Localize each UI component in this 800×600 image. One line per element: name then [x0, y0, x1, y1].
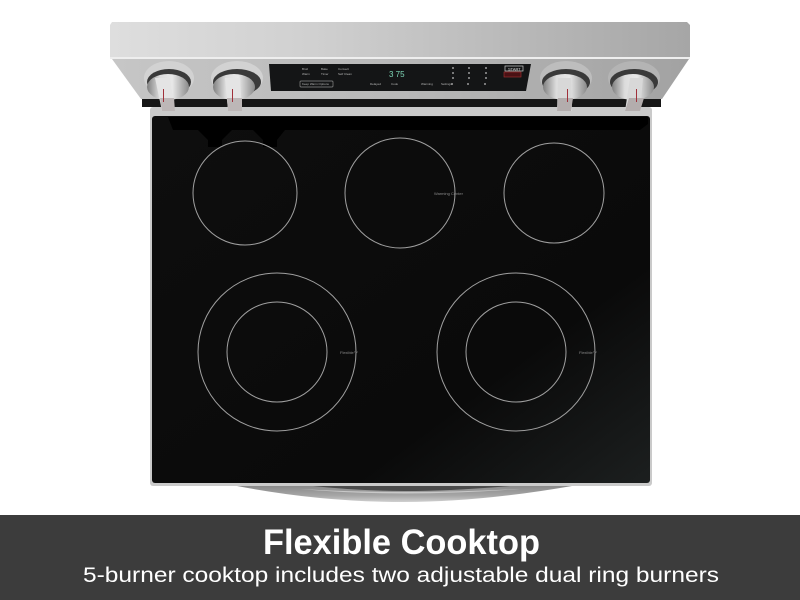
subheading: 5-burner cooktop includes two adjustable dual ring burners [83, 564, 719, 587]
burner: rear center warming: Warming Center [434, 191, 464, 196]
control display panel: Cook [391, 82, 399, 86]
control display panel: Delayed [370, 82, 381, 86]
control display panel: Warming [421, 82, 433, 86]
burner: front right dual ring [437, 273, 597, 431]
control display panel: Bake [321, 67, 328, 71]
burner: front left dual ring [198, 273, 358, 431]
control knob 1 [144, 61, 194, 111]
control display panel: Keep Warm Options [302, 82, 329, 86]
control display panel: Broil [302, 67, 308, 71]
control knob 4 [608, 61, 660, 111]
burner: rear center warming [345, 138, 464, 248]
burner: front left dual ring: Flexible™ [340, 350, 358, 355]
heading: Flexible Cooktop [263, 523, 540, 562]
burner: front right dual ring: Flexible™ [579, 350, 597, 355]
control display panel [269, 64, 531, 91]
oven door handle [237, 486, 572, 502]
reflection of knobs on glass [154, 117, 648, 147]
start and stop buttons [504, 66, 523, 77]
control display panel: Warm [302, 72, 310, 76]
control knob 3 [540, 61, 592, 111]
steel cooktop body [150, 107, 652, 486]
control display panel: Self Clean [338, 72, 352, 76]
glass cooktop [152, 116, 650, 483]
oven display readout: 3 75 [389, 70, 405, 79]
range top panel [110, 22, 690, 99]
control knob 2 [211, 61, 263, 111]
burner: rear left [193, 141, 297, 245]
black strip under control panel [142, 99, 661, 107]
burner: rear right [504, 143, 604, 243]
caption banner [0, 515, 800, 600]
control display panel: Convect [338, 67, 349, 71]
control display panel: Settings [441, 82, 452, 86]
control display panel: Timer [321, 72, 329, 76]
start and stop buttons: START [508, 66, 521, 71]
